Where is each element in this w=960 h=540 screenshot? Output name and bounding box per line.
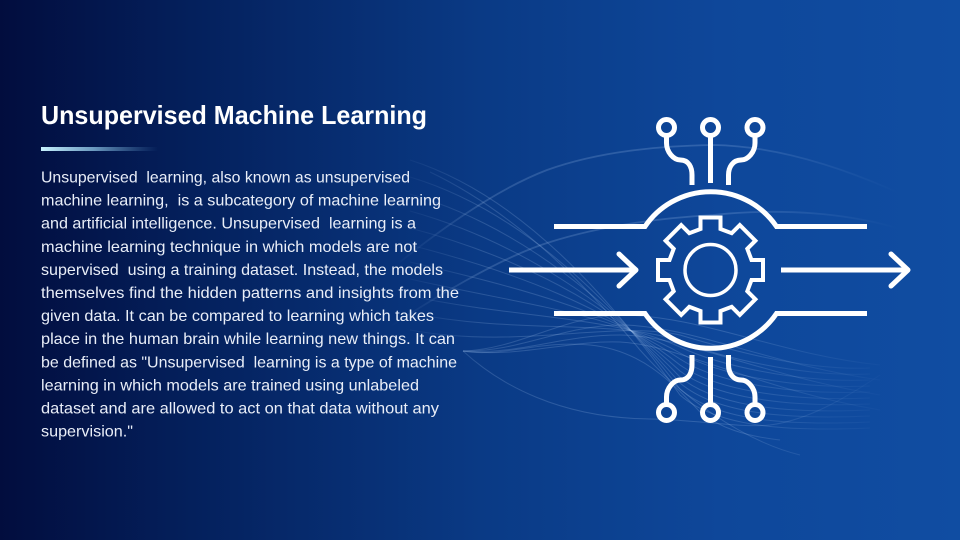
body text: supervision." xyxy=(41,424,133,441)
icon: bottom circuit nodes xyxy=(658,355,763,420)
body text: place in the human brain while learning new things. It can xyxy=(41,331,455,348)
body text: supervised using a training dataset. Instead, the models xyxy=(41,262,443,279)
body text: dataset and are allowed to act on that data without any xyxy=(41,400,439,418)
title underline xyxy=(41,147,158,151)
icon: housing top xyxy=(554,192,867,226)
arrow: input xyxy=(509,254,636,286)
body text: machine learning, is a subcategory of machine learning xyxy=(41,193,441,210)
arrow: output xyxy=(781,254,908,286)
body text: learning in which models are trained using unlabeled xyxy=(41,377,419,394)
icon: gear xyxy=(658,218,763,322)
body text: Unsupervised learning, also known as unsupervised xyxy=(41,170,410,186)
body text: given data. It can be compared to learning which takes xyxy=(41,308,434,325)
body text: machine learning technique in which models are not xyxy=(41,239,418,256)
body text: themselves find the hidden patterns and insights from the xyxy=(41,285,459,302)
icon: machine learning gear xyxy=(509,120,908,420)
icon: housing bottom xyxy=(554,314,867,348)
body text xyxy=(41,170,459,441)
body text: be defined as "Unsupervised learning is a type of machine xyxy=(41,354,457,371)
title: Unsupervised Machine Learning xyxy=(41,100,427,130)
icon: top circuit nodes xyxy=(658,120,763,185)
body text: and artificial intelligence. Unsupervised learning is a xyxy=(41,216,416,233)
